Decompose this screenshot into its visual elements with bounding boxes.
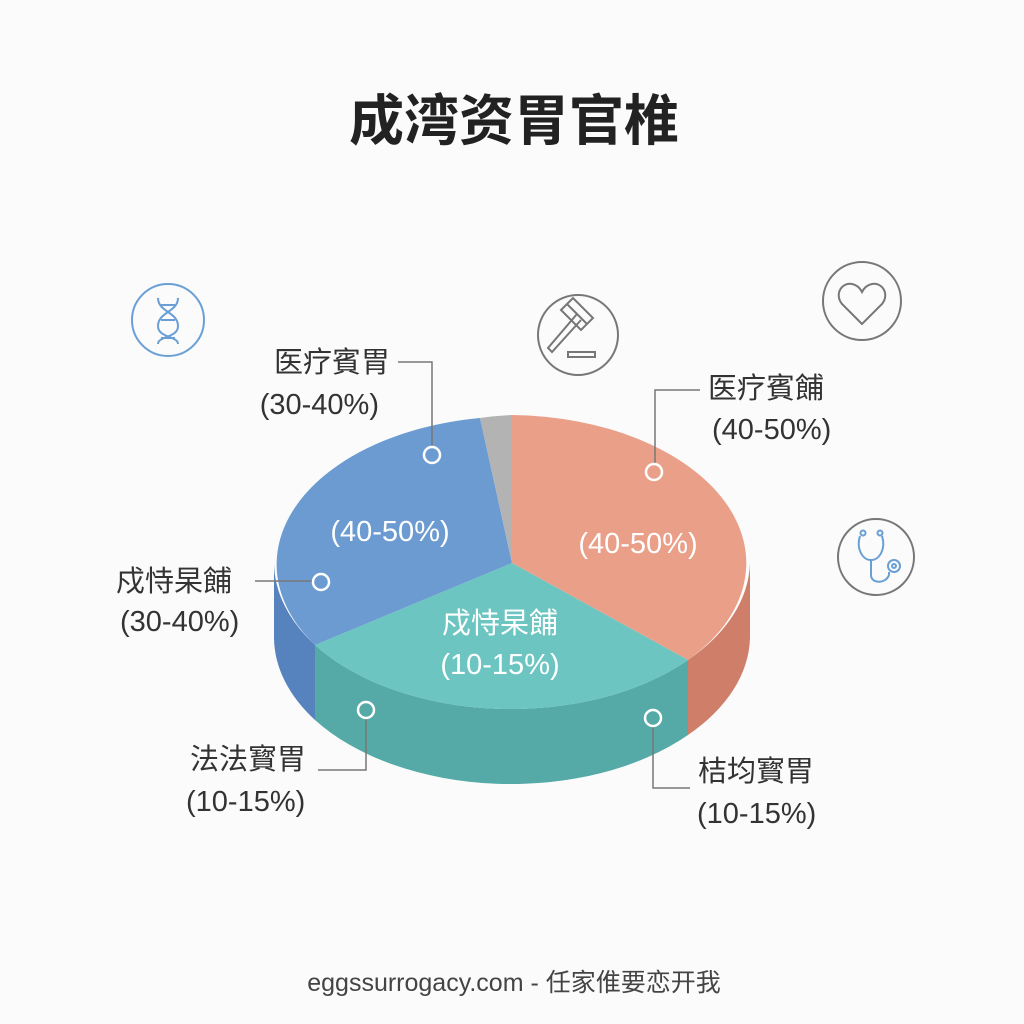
inner label teal: (10-15%) [440, 649, 560, 681]
callout: bottom-left [186, 702, 374, 818]
callout: top-left: (30-40%) [260, 389, 379, 421]
icon: gavel [538, 295, 618, 375]
callout: top-left: 医疗賓胃 [274, 346, 390, 379]
callout: top-right [646, 372, 831, 480]
slice: blue [277, 418, 512, 645]
inner label blue: (40-50%) [330, 516, 450, 548]
icon: stethoscope [838, 519, 914, 595]
icon: heart [823, 262, 901, 340]
callout: bottom-left: 法法寳胃 [190, 743, 306, 776]
side: blue [274, 563, 315, 720]
callout: bottom-right: 桔均寳胃 [698, 755, 814, 788]
footer: eggssurrogacy.com - 任家倠要恋开我 [307, 969, 721, 997]
slice: teal [315, 563, 688, 709]
callout: left: (30-40%) [120, 606, 239, 638]
callout: top-left [260, 346, 440, 463]
callout: left: 戍恃杲餔 [116, 565, 232, 598]
callout: top-right: (40-50%) [712, 414, 831, 446]
callout: top-right: 医疗賓餔 [708, 372, 824, 405]
callout: bottom-right: (10-15%) [697, 798, 816, 830]
callout: left [116, 565, 329, 638]
inner label salmon: (40-50%) [578, 528, 698, 560]
slice: gray [480, 415, 512, 563]
callout: bottom-right [645, 710, 816, 830]
side: salmon [688, 563, 750, 735]
callout: bottom-left: (10-15%) [186, 786, 305, 818]
icon: DNA [132, 284, 204, 356]
side: teal [315, 645, 688, 784]
title: 成湾资胃官椎 [349, 90, 679, 152]
inner label teal [440, 607, 560, 681]
pie chart [274, 415, 750, 784]
inner label teal: 戍恃杲餔 [442, 607, 558, 640]
slice: salmon [512, 415, 746, 660]
